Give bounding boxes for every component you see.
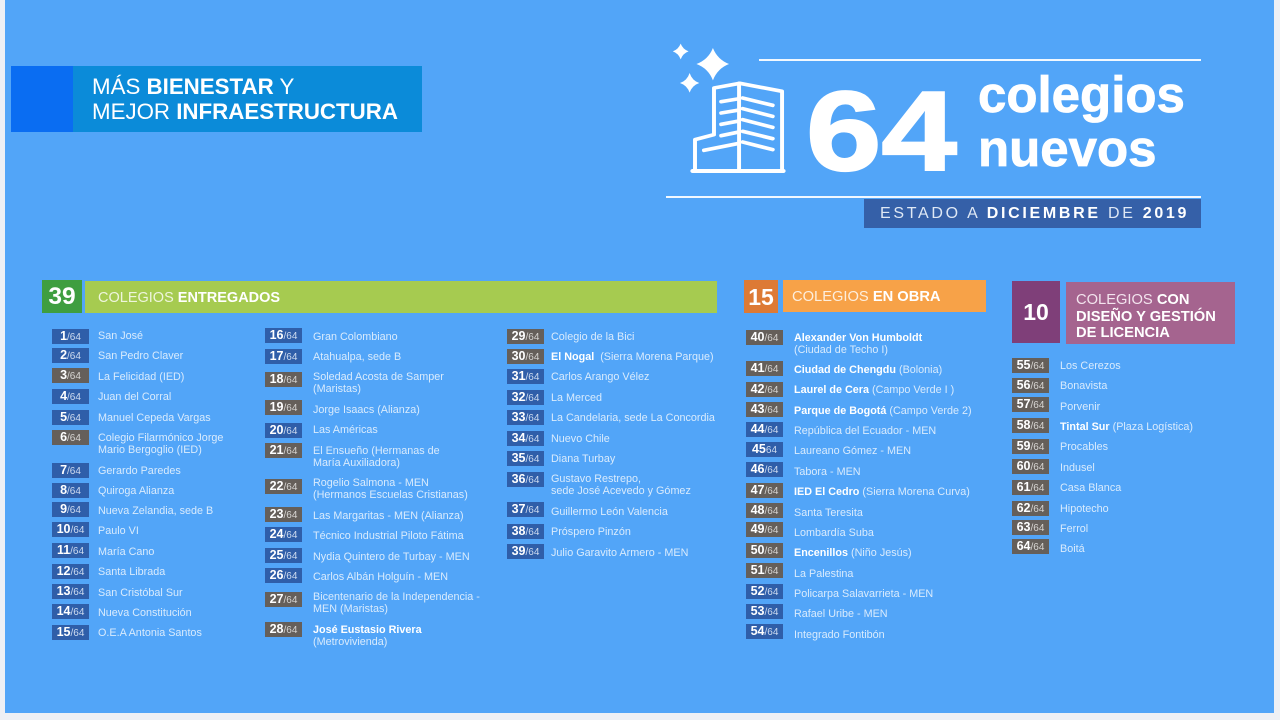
row 45	[746, 442, 981, 457]
row 46: Tabora - MEN	[794, 466, 861, 478]
count box: 15: 15	[748, 284, 774, 310]
row 29	[507, 329, 634, 344]
row 4: 4/64	[60, 389, 81, 403]
row 53: Rafael Uribe - MEN	[794, 608, 888, 620]
row 12	[52, 564, 166, 579]
row 17: Atahualpa, sede B	[313, 351, 401, 363]
row 60: Indusel	[1060, 462, 1095, 474]
row 2	[52, 348, 184, 363]
row 52: Policarpa Salavarrieta - MEN	[794, 588, 933, 600]
row 49: 49/64	[751, 522, 778, 536]
row 54: 54/64	[751, 624, 778, 638]
count box: 15	[744, 280, 778, 313]
row 45: Laureano Gómez - MEN	[794, 445, 911, 457]
row 47	[746, 483, 981, 498]
row 32	[507, 390, 602, 405]
row 43: 43/64	[751, 402, 778, 416]
row 16: 16/64	[270, 328, 297, 342]
row 62	[1012, 501, 1202, 516]
row 9: Nueva Zelandia, sede B	[98, 505, 213, 517]
row 46	[746, 462, 981, 477]
row 55	[1012, 358, 1202, 373]
row 26: 26/64	[270, 568, 297, 582]
row 22: (Hermanos Escuelas Cristianas)	[313, 489, 468, 501]
row 56: Bonavista	[1060, 380, 1107, 392]
row 35: Diana Turbay	[551, 453, 615, 465]
row 10: 10/64	[57, 522, 84, 536]
row 12: 12/64	[57, 564, 84, 578]
row 23: 23/64	[270, 507, 297, 521]
row 5: Manuel Cepeda Vargas	[98, 412, 211, 424]
row 11: María Cano	[98, 546, 154, 558]
row 16	[265, 328, 398, 343]
row 34: Nuevo Chile	[551, 433, 610, 445]
row 55: 55/64	[1017, 358, 1044, 372]
status bar: estado a diciembre de 2019	[864, 199, 1201, 228]
row 62: 62/64	[1017, 501, 1044, 515]
row 18: (Maristas)	[313, 383, 361, 395]
row 28: (Metrovivienda)	[313, 636, 387, 648]
row 50: 50/64	[751, 543, 778, 557]
row 15: O.E.A Antonia Santos	[98, 627, 202, 639]
row 32: 32/64	[512, 390, 539, 404]
row 41	[746, 361, 981, 376]
row 13	[52, 584, 183, 599]
row 48	[746, 503, 981, 518]
row 60	[1012, 459, 1202, 474]
heading: colegios con diseño y gestión de licencia	[1066, 282, 1235, 344]
row 27: Bicentenario de la Independencia -	[313, 591, 480, 603]
row 18: Soledad Acosta de Samper	[313, 371, 444, 383]
row 30	[507, 349, 714, 364]
row 29: 29/64	[512, 329, 539, 343]
row 25	[265, 548, 470, 563]
banner: más bienestar y mejor infraestructura	[11, 66, 422, 132]
heading: colegios entregados: COLEGIOS ENTREGADOS	[98, 290, 280, 306]
row 51: La Palestina	[794, 568, 853, 580]
row 24: Técnico Industrial Piloto Fátima	[313, 530, 464, 542]
title: colegios nuevos: colegios	[978, 66, 1185, 123]
row 17	[265, 349, 401, 364]
row 59	[1012, 439, 1202, 454]
row 49: Lombardía Suba	[794, 527, 874, 539]
count box: 10: 10	[1023, 299, 1049, 325]
row 20: Las Américas	[313, 424, 378, 436]
row 58	[1012, 418, 1202, 433]
row 6: Colegio Filarmónico Jorge	[98, 432, 223, 444]
row 27: 27/64	[270, 592, 297, 606]
banner heading: MÁS BIENESTAR Y	[92, 74, 294, 99]
row 27: MEN (Maristas)	[313, 603, 388, 615]
row 44	[746, 422, 981, 437]
row 25: Nydia Quintero de Turbay - MEN	[313, 551, 470, 563]
row 1	[52, 329, 143, 344]
row 23: Las Margaritas - MEN (Alianza)	[313, 510, 464, 522]
row 38: 38/64	[512, 524, 539, 538]
row 1: San José	[98, 330, 143, 342]
row 22	[265, 477, 468, 501]
row 41: Ciudad de Chengdu (Bolonia)	[794, 364, 942, 376]
row 29: Colegio de la Bici	[551, 331, 634, 343]
row 63: 63/64	[1017, 520, 1044, 534]
row 19	[265, 400, 420, 416]
row 42: Laurel de Cera (Campo Verde I )	[794, 384, 954, 396]
heading: colegios en obra: COLEGIOS EN OBRA	[792, 289, 941, 305]
row 22: Rogelio Salmona - MEN	[313, 477, 429, 489]
row 23	[265, 507, 464, 522]
row 46: 46/64	[751, 462, 778, 476]
row 42	[746, 382, 981, 397]
count box: 39	[42, 280, 82, 313]
row 34: 34/64	[512, 431, 539, 445]
row 28	[265, 622, 422, 648]
row 26: Carlos Albán Holguín - MEN	[313, 571, 448, 583]
row 9	[52, 502, 213, 517]
row 38	[507, 524, 722, 539]
row 14	[52, 604, 192, 619]
row 58: 58/64	[1017, 418, 1044, 432]
row 31: 31/64	[512, 369, 539, 383]
row 3: La Felicidad (IED)	[98, 371, 184, 383]
row 57: 57/64	[1017, 397, 1044, 411]
row 2: San Pedro Claver	[98, 350, 183, 362]
row 52	[746, 584, 981, 599]
row 56	[1012, 378, 1202, 393]
row 59: Procables	[1060, 441, 1108, 453]
row 5: 5/64	[60, 410, 81, 424]
row 11	[52, 543, 154, 558]
banner accent block	[11, 66, 73, 132]
row 10	[52, 522, 139, 537]
row 5	[52, 410, 211, 425]
title: colegios nuevos: nuevos	[978, 120, 1157, 177]
title: colegios nuevos	[978, 66, 1185, 177]
row 51: 51/64	[751, 563, 778, 577]
row 36: sede José Acevedo y Gómez	[551, 485, 691, 497]
row 22: 22/64	[270, 479, 297, 493]
row 27	[265, 591, 480, 615]
row 4: Juan del Corral	[98, 391, 171, 403]
row 14: Nueva Constitución	[98, 607, 192, 619]
row 40	[746, 330, 981, 358]
row 38: Próspero Pinzón	[551, 526, 631, 538]
row 39: Julio Garavito Armero - MEN	[551, 547, 688, 559]
row 53	[746, 604, 981, 619]
row 36: 36/64	[512, 472, 539, 486]
row 21: María Auxiliadora)	[313, 457, 400, 469]
row 37: Guillermo León Valencia	[551, 506, 668, 518]
row 39: 39/64	[512, 544, 539, 558]
row 7	[52, 463, 181, 478]
row 8: 8/64	[60, 483, 81, 497]
row 7: Gerardo Paredes	[98, 465, 181, 477]
row 13: 13/64	[57, 584, 84, 598]
row 18: 18/64	[270, 372, 297, 386]
row 50: Encenillos (Niño Jesús)	[794, 547, 912, 559]
row 33: 33/64	[512, 410, 539, 424]
row 33: La Candelaria, sede La Concordia	[551, 412, 715, 424]
row 12: Santa Librada	[98, 566, 165, 578]
list: diseño y licencia	[1012, 350, 1202, 560]
row 2: 2/64	[60, 348, 81, 362]
row 48: Santa Teresita	[794, 507, 863, 519]
list: en obra	[746, 325, 981, 645]
row 61: 61/64	[1017, 480, 1044, 494]
row 40: 40/64	[751, 330, 778, 344]
row 42: 42/64	[751, 382, 778, 396]
row 6: 6/64	[60, 430, 81, 444]
row 37	[507, 502, 722, 517]
row 57	[1012, 397, 1202, 412]
row 19: 19/64	[270, 400, 297, 414]
row 28: José Eustasio Rivera	[313, 624, 422, 636]
heading: colegios con diseño y gestión de licencia: DISEÑO Y GESTIÓN	[1076, 308, 1216, 324]
row 3: 3/64	[60, 368, 81, 382]
row 24: 24/64	[270, 527, 297, 541]
list: entregados column 3	[507, 329, 715, 559]
row 20: 20/64	[270, 423, 297, 437]
row 17: 17/64	[270, 349, 297, 363]
row 54: Integrado Fontibón	[794, 629, 885, 641]
row 40: (Ciudad de Techo I)	[794, 344, 888, 356]
row 52: 52/64	[751, 584, 778, 598]
row 9: 9/64	[60, 502, 81, 516]
row 64: Boitá	[1060, 543, 1085, 555]
row 7: 7/64	[60, 463, 81, 477]
row 48: 48/64	[751, 503, 778, 517]
row 24	[265, 527, 464, 542]
row 31: Carlos Arango Vélez	[551, 371, 649, 383]
row 56: 56/64	[1017, 378, 1044, 392]
row 16: Gran Colombiano	[313, 331, 398, 343]
row 20	[265, 423, 378, 438]
row 8	[52, 483, 174, 498]
banner heading: MEJOR INFRAESTRUCTURA	[92, 99, 398, 124]
row 21: 21/64	[270, 443, 297, 457]
banner heading	[92, 74, 398, 124]
count box: 10	[1012, 281, 1060, 343]
row 61: Casa Blanca	[1060, 482, 1121, 494]
row 36	[507, 472, 722, 500]
row 51	[746, 563, 981, 578]
row 21: El Ensueño (Hermanas de	[313, 445, 440, 457]
row 13: San Cristóbal Sur	[98, 587, 183, 599]
row 4	[52, 389, 171, 404]
row 58: Tintal Sur (Plaza Logística)	[1060, 421, 1193, 433]
heading: colegios con diseño y gestión de licencia: COLEGIOS CON	[1076, 292, 1189, 308]
row 26	[265, 568, 448, 583]
row 15	[52, 625, 202, 640]
status bar: estado a diciembre de 2019: ESTADO A DICIEMBRE DE 2019	[880, 205, 1189, 222]
row 30: 30/64	[512, 349, 539, 363]
row 25: 25/64	[270, 548, 297, 562]
row 43: Parque de Bogotá (Campo Verde 2)	[794, 405, 972, 417]
heading: colegios entregados	[85, 281, 717, 313]
row 39	[507, 544, 722, 559]
row 40: Alexander Von Humboldt	[794, 332, 922, 344]
row 63	[1012, 520, 1202, 535]
row 64: 64/64	[1017, 539, 1044, 553]
row 14: 14/64	[57, 604, 84, 618]
big number 64: 64	[806, 68, 957, 194]
row 49	[746, 522, 981, 537]
row 6	[52, 430, 223, 456]
list: entregados column 2	[265, 328, 480, 648]
row 11: 11/64	[57, 543, 84, 557]
row 35	[507, 451, 722, 466]
row 50	[746, 543, 981, 558]
row 15: 15/64	[57, 625, 84, 639]
row 44: 44/64	[751, 422, 778, 436]
row 61	[1012, 480, 1202, 495]
row 37: 37/64	[512, 502, 539, 516]
row 1: 1/64	[60, 329, 81, 343]
row 53: 53/64	[751, 604, 778, 618]
row 30: El Nogal (Sierra Morena Parque)	[551, 351, 714, 363]
row 57: Porvenir	[1060, 401, 1100, 413]
row 59: 59/64	[1017, 439, 1044, 453]
list: entregados column 1	[52, 329, 223, 640]
row 28: 28/64	[270, 622, 297, 636]
row 60: 60/64	[1017, 459, 1044, 473]
row 55: Los Cerezos	[1060, 360, 1121, 372]
heading: colegios en obra	[783, 280, 986, 312]
row 10: Paulo VI	[98, 525, 139, 537]
count box: 39: 39	[48, 283, 76, 310]
row 41: 41/64	[751, 361, 778, 375]
row 36: Gustavo Restrepo,	[551, 473, 641, 485]
row 47: IED El Cedro (Sierra Morena Curva)	[794, 486, 970, 498]
row 63: Ferrol	[1060, 523, 1088, 535]
row 62: Hipotecho	[1060, 503, 1109, 515]
row 8: Quiroga Alianza	[98, 485, 174, 497]
row 32: La Merced	[551, 392, 602, 404]
row 33	[507, 410, 715, 425]
row 19: Jorge Isaacs (Alianza)	[313, 404, 420, 416]
row 44: República del Ecuador - MEN	[794, 425, 936, 437]
row 3	[52, 368, 184, 383]
row 34	[507, 431, 610, 446]
icon: building with sparkles	[672, 44, 786, 173]
row 45: 4564	[752, 442, 777, 456]
row 18	[265, 371, 444, 395]
middle rule	[666, 196, 1201, 198]
top rule	[759, 59, 1201, 61]
row 64	[1012, 539, 1202, 554]
row 43	[746, 402, 981, 417]
row 6: Mario Bergoglio (IED)	[98, 444, 202, 456]
row 31	[507, 369, 649, 384]
row 47: 47/64	[751, 483, 778, 497]
heading: colegios con diseño y gestión de licencia: DE LICENCIA	[1076, 325, 1170, 341]
row 35: 35/64	[512, 451, 539, 465]
row 21	[265, 443, 440, 469]
row 54	[746, 624, 981, 639]
